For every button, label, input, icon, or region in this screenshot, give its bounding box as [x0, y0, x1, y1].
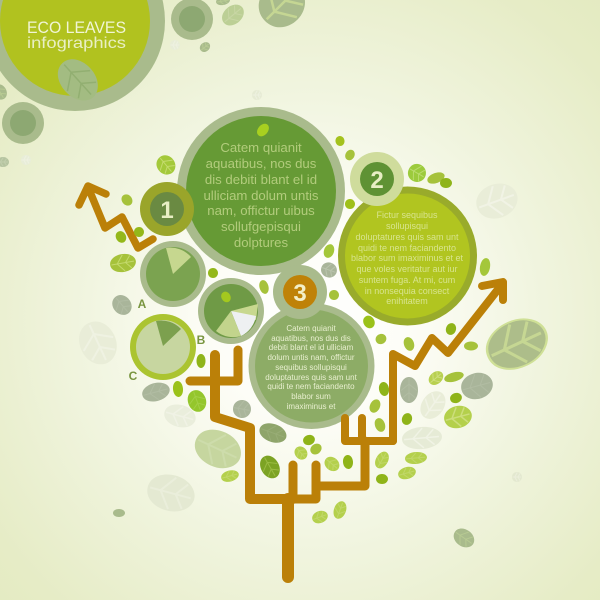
badge 2: [350, 152, 404, 206]
scattered leaves: upper: [0, 0, 315, 178]
text block two: in nonsequia consect: [365, 286, 450, 296]
text block one: [203, 140, 319, 250]
text block one: dolptures: [234, 235, 289, 250]
chart labels: C: [129, 369, 138, 383]
text block one: nam, offictur uibus: [207, 203, 315, 218]
text block one: Catem quianit: [220, 140, 302, 155]
text block three: dolum untis nam, offictur: [267, 353, 355, 362]
tree trunk and branches: [190, 350, 393, 577]
badge 1: 1: [160, 197, 174, 224]
title: infographics: [27, 35, 126, 52]
pie chart A: [140, 241, 206, 307]
text block one: ulliciam dolum untis: [203, 188, 319, 203]
title: ECO LEAVES: [27, 18, 126, 37]
text block two: enihitatem: [386, 296, 428, 306]
text block one: sollufgepisqui: [221, 219, 301, 234]
chart labels: B: [197, 333, 206, 347]
text block two: [351, 210, 464, 306]
panel: circle three text: [248, 303, 374, 429]
scattered leaves: around the tree: [72, 135, 555, 551]
text block one: dis debiti blant el id: [205, 172, 317, 187]
pie chart B: [198, 278, 264, 344]
arrow: left zigzag: [79, 186, 153, 248]
text block three: doluptatures quis sam unt: [265, 373, 358, 382]
text block two: blabor sum imaximinus et et: [351, 253, 464, 263]
text block three: [265, 324, 358, 411]
panel: circle two text: [338, 186, 477, 326]
text block two: sollupisqui: [386, 221, 428, 231]
text block three: imaximinus et: [287, 402, 336, 411]
text block three: blabor sum: [291, 392, 331, 401]
text block two: suntem fuga. At mi, cum: [359, 275, 455, 285]
icon: small leaf: [255, 121, 271, 139]
text block two: doluptatures quis sam unt: [355, 232, 459, 242]
text block three: sequibus sollupisqui: [275, 363, 347, 372]
arrow: right rising: [393, 282, 503, 441]
header: title disc: [0, 0, 165, 111]
text block three: Catem quianit: [286, 324, 336, 333]
pie chart C: [130, 314, 196, 380]
badge 1: [140, 182, 194, 236]
badge 2: 2: [370, 167, 384, 194]
icon: leaf on title disc: [50, 52, 106, 108]
text block two: Fictur sequibus: [376, 210, 438, 220]
badge 3: [273, 265, 327, 319]
decorative rings: [2, 0, 213, 144]
chart labels: A: [138, 297, 147, 311]
text block three: quidi te nem faciandento: [267, 382, 355, 391]
badge 3: 3: [293, 280, 307, 307]
text block two: quidi te nem faciandento: [358, 243, 456, 253]
title: [27, 18, 126, 52]
text block two: que voles veritatur aut iur: [356, 264, 458, 274]
chart labels: [129, 297, 206, 383]
text block three: debiti blant el id ulliciam: [269, 343, 354, 352]
text block three: aquatibus, nos dus dis: [271, 334, 351, 343]
text block one: aquatibus, nos dus: [206, 156, 317, 171]
panel: circle one text: [177, 107, 345, 275]
